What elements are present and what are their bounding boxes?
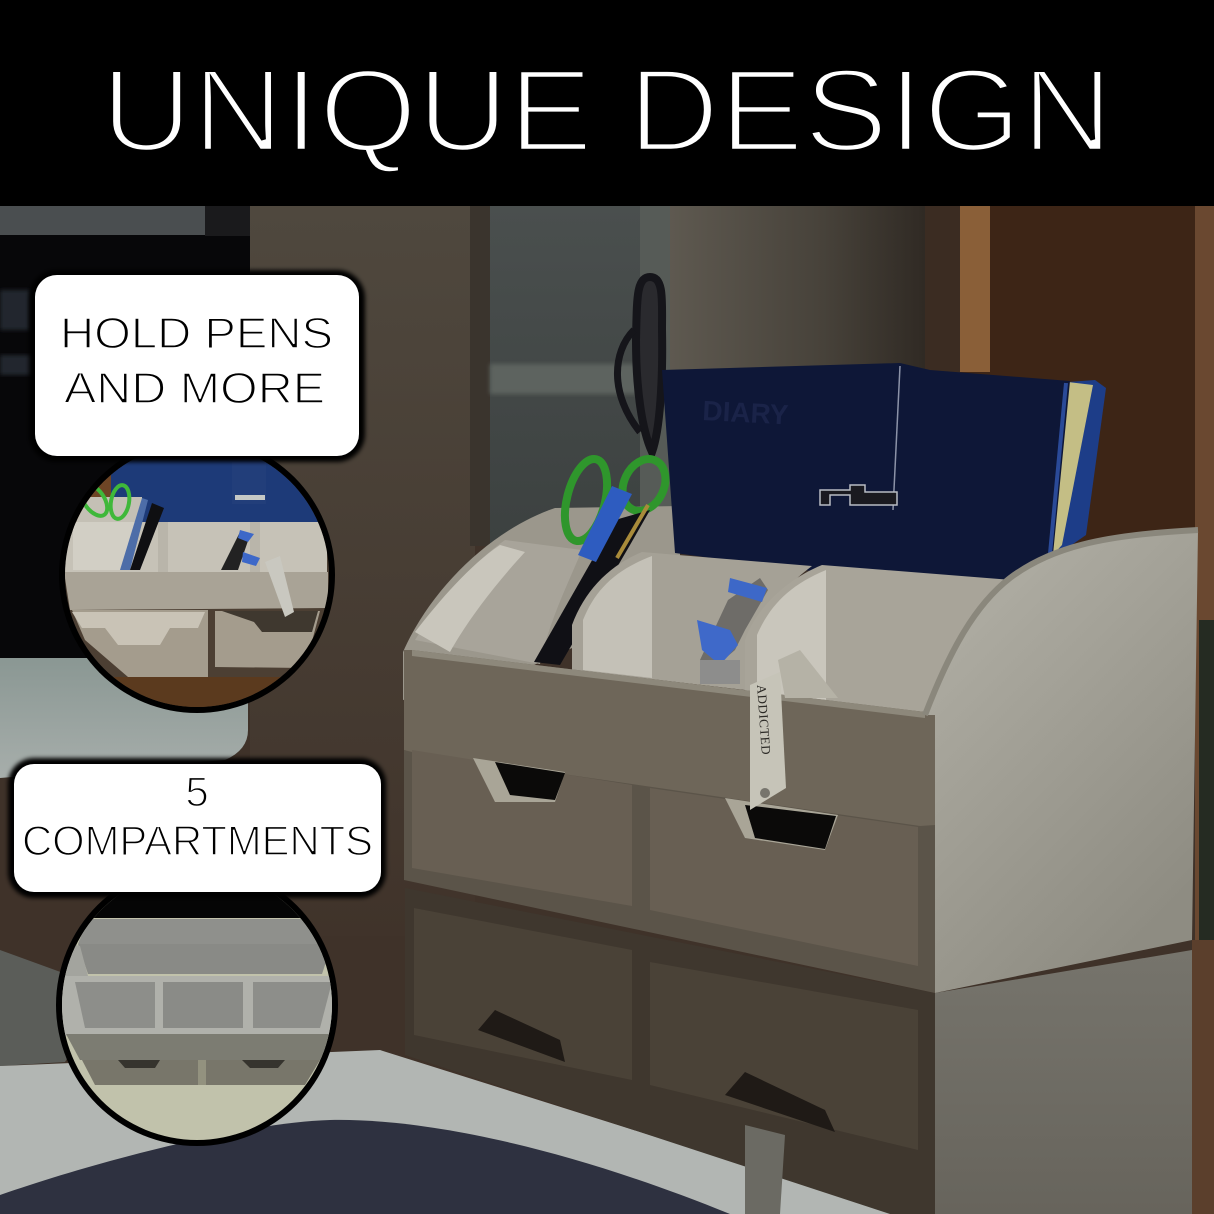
front rail [404, 650, 935, 826]
notebook embossed label: DIARY [702, 395, 790, 431]
stapler [697, 578, 768, 684]
organizer reflection on table [405, 888, 1192, 1214]
callout: hold pens and more [29, 270, 365, 462]
right drawer [650, 788, 918, 966]
hang tag [750, 650, 838, 810]
scissors green loops [557, 452, 674, 545]
scissors black handles [617, 277, 662, 452]
callout text: hold pens and more: HOLD PENS [60, 309, 333, 358]
pens [534, 486, 650, 665]
callout text: 5 compartments: COMPARTMENTS [22, 817, 373, 864]
inset circle: pens and more [59, 459, 335, 713]
title banner [0, 0, 1214, 206]
compartment two [572, 552, 812, 690]
left drawer pull [473, 758, 565, 802]
callout text: hold pens and more: AND MORE [64, 364, 325, 413]
callout: 5 compartments [8, 758, 386, 898]
notebook metal clasp [820, 485, 897, 505]
callout text: hold pens and more [60, 309, 333, 413]
desk organizer [403, 277, 1198, 993]
callout text: 5 compartments: 5 [185, 768, 209, 815]
title: UNIQUE DESIGN [101, 45, 1113, 177]
hang tag: ADDICTED [754, 684, 774, 755]
inset circle: five compartments [56, 896, 338, 1146]
right drawer pull [725, 798, 838, 850]
compartment one [415, 540, 582, 664]
organizer rear shell [403, 506, 680, 700]
left drawer [412, 750, 632, 906]
right side panel [925, 530, 1198, 993]
organizer body [404, 750, 935, 993]
compartment three [745, 565, 1012, 712]
laptop lid foreground [0, 1120, 730, 1214]
notebook [662, 363, 1106, 585]
callout text: 5 compartments [22, 768, 373, 864]
